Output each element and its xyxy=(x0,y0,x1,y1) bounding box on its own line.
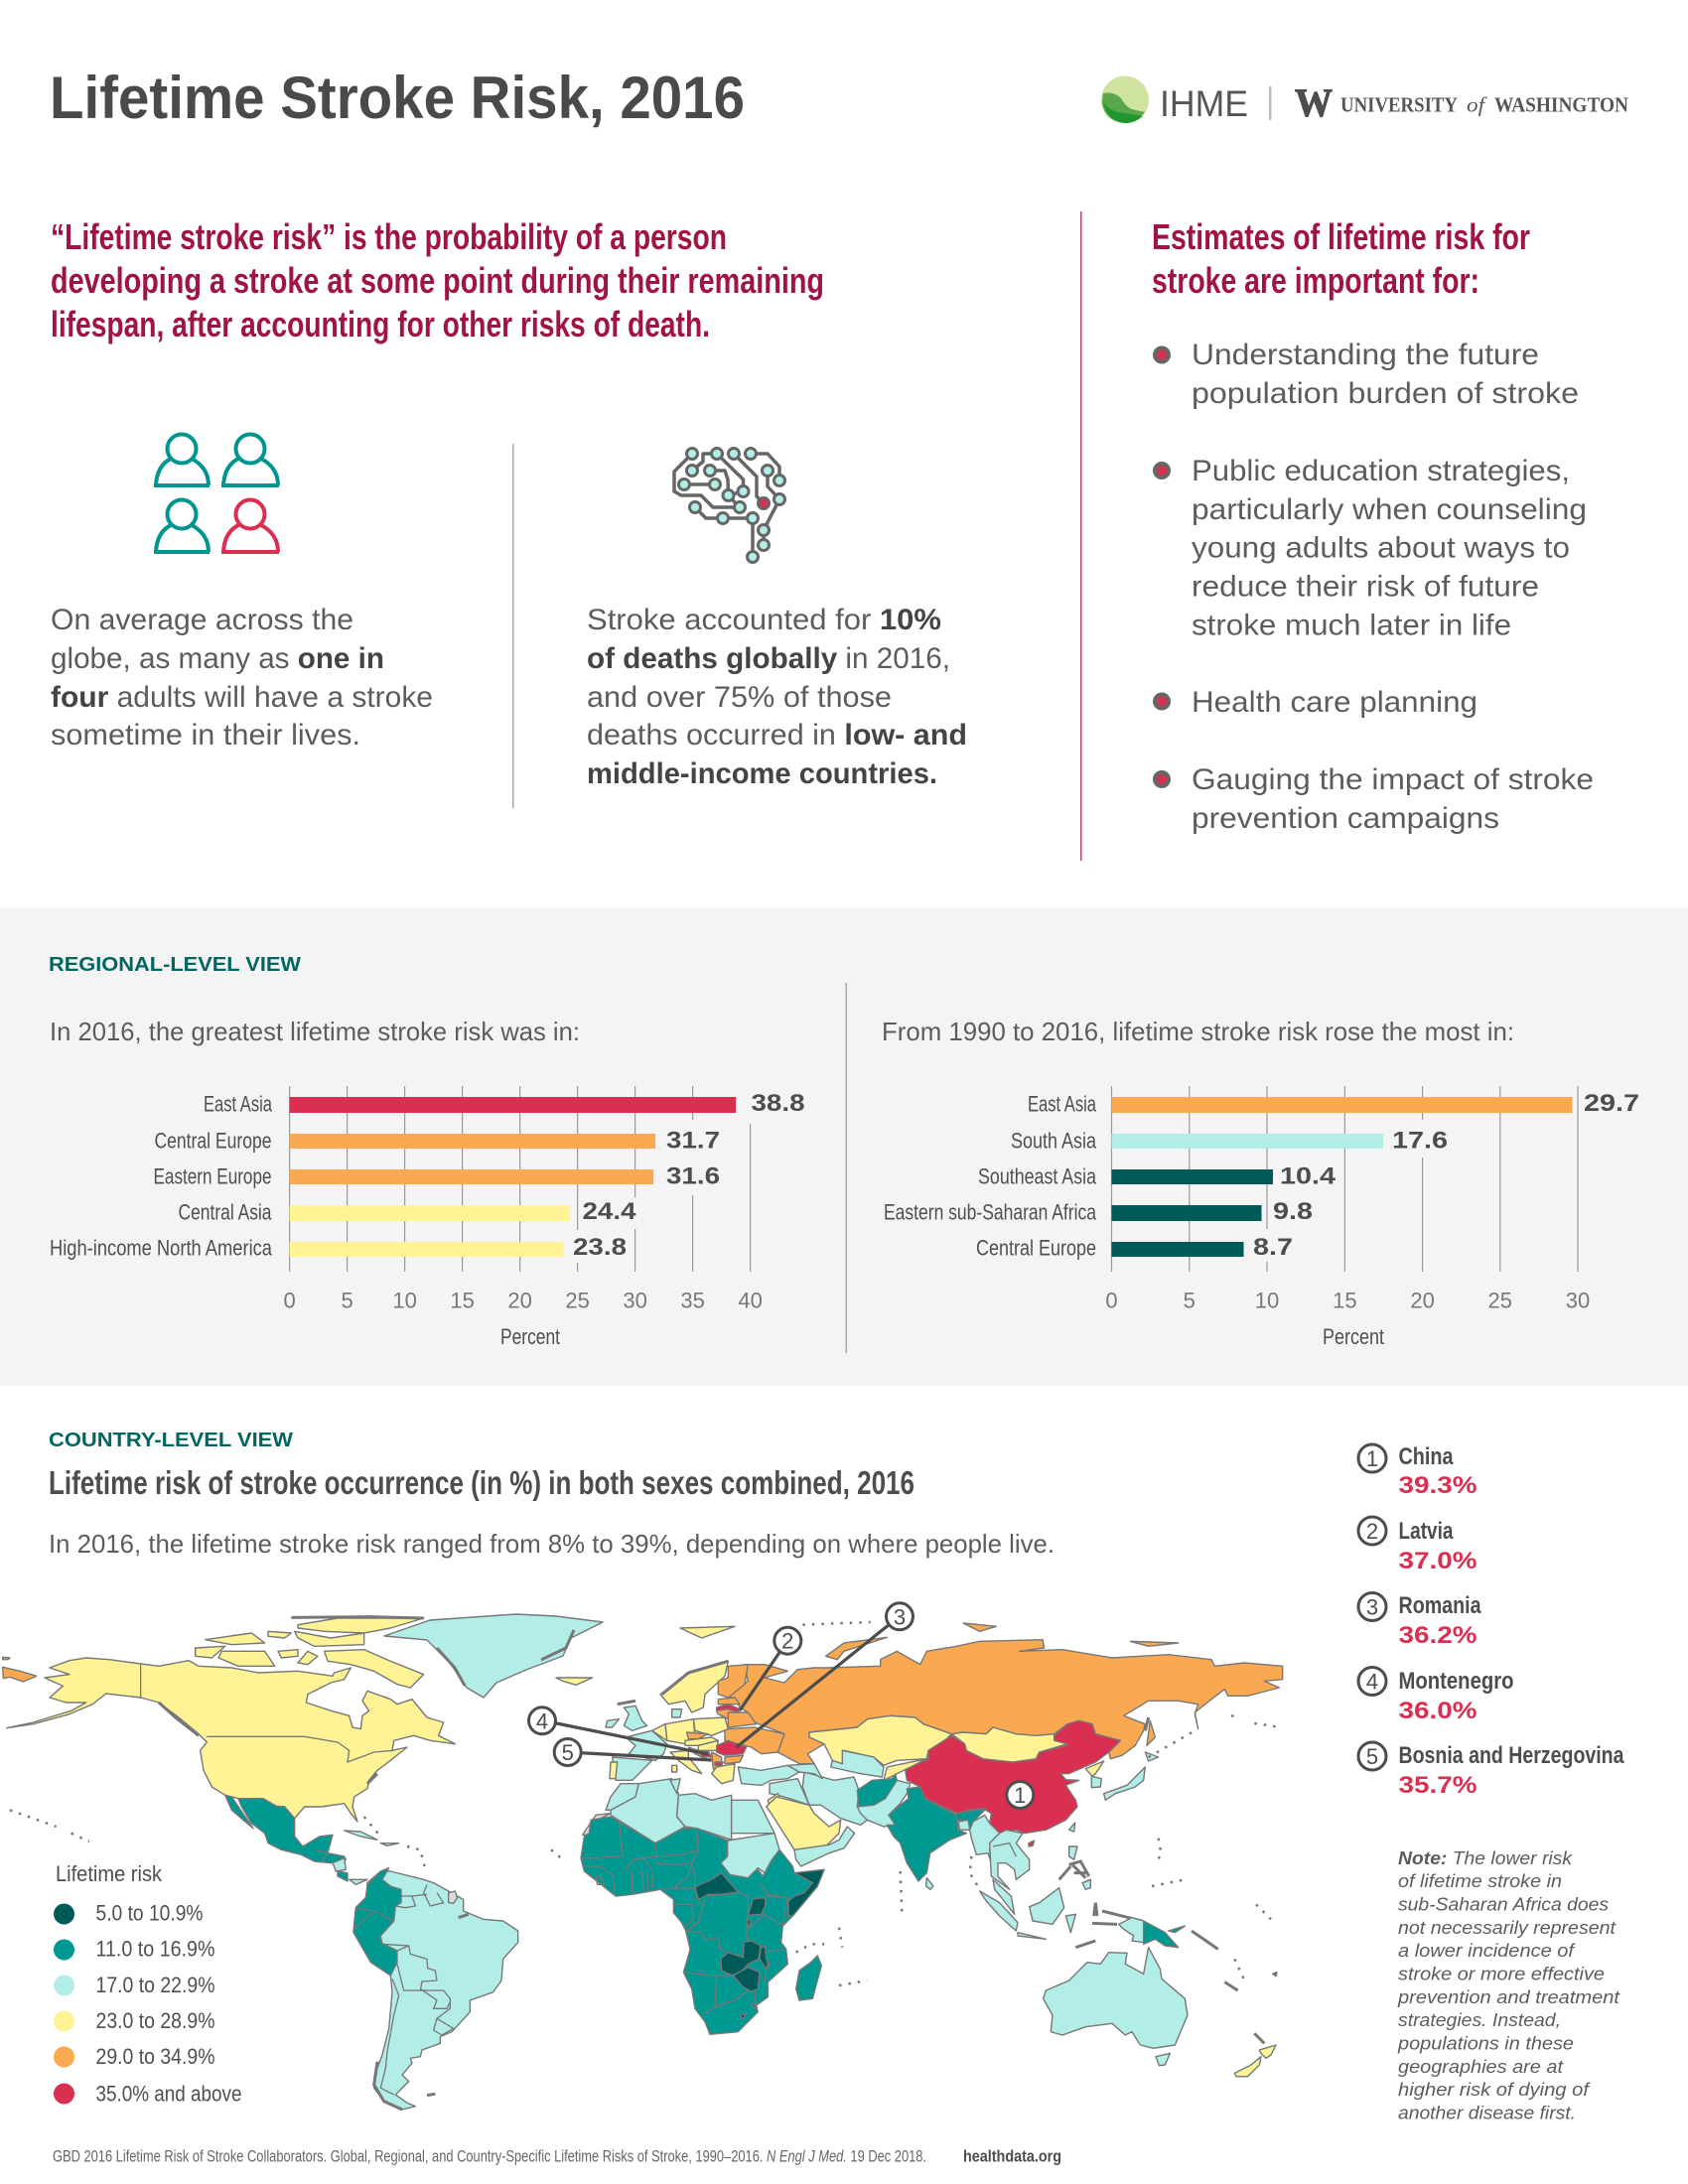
icon: IHME globe xyxy=(1101,75,1149,123)
rank 3: Romania: Romania xyxy=(1398,1592,1481,1619)
note: prevention and treatment xyxy=(1397,1987,1620,2007)
bar chart: greatest risk 2016 xyxy=(50,1017,808,1349)
bar chart: greatest risk 2016: High-income North America xyxy=(50,1235,273,1261)
map: South America xyxy=(353,1868,518,2110)
text: ten percent of deaths: of deaths globally in 2016, xyxy=(587,642,950,675)
University of Washington wordmark: UNIVERSITY xyxy=(1340,93,1458,117)
text: one in four xyxy=(51,604,433,751)
note: strategies. Instead, xyxy=(1398,2010,1561,2030)
world map xyxy=(3,1614,1283,2110)
importance heading xyxy=(1152,216,1530,301)
text: ten percent of deaths: Stroke accounted for 10% xyxy=(587,604,941,636)
importance heading: stroke are important for: xyxy=(1152,260,1479,301)
axis labels: 35 xyxy=(680,1289,705,1312)
map legend: Lifetime risk xyxy=(56,1861,163,1886)
rank 3: Romania: 3 xyxy=(1366,1594,1378,1620)
axis labels: 15 xyxy=(450,1289,475,1312)
rank 4: Montenegro: 4 xyxy=(1366,1670,1378,1694)
rank 2: Latvia: Latvia xyxy=(1398,1518,1454,1545)
bullet list: population burden of stroke xyxy=(1192,377,1579,410)
rank 2: Latvia xyxy=(1358,1517,1477,1574)
bullet list xyxy=(1155,339,1594,835)
chart subtitle: In 2016, the greatest lifetime stroke risk was in: xyxy=(50,1017,580,1046)
bullet list: Gauging the impact of stroke xyxy=(1192,763,1594,796)
bar chart: largest rise 1990 to 2016: 8.7 xyxy=(1253,1234,1293,1261)
axis labels: 0 xyxy=(283,1289,296,1312)
map legend: 11.0 to 16.9% xyxy=(95,1936,214,1962)
bar chart: largest rise 1990 to 2016: Central Europe xyxy=(976,1235,1096,1261)
axis labels: 25 xyxy=(565,1289,590,1312)
axis labels: 30 xyxy=(1566,1289,1590,1312)
note xyxy=(1397,1848,1620,2122)
note: Note: The lower risk xyxy=(1398,1848,1573,1868)
map: Asia xyxy=(728,1623,1283,1921)
definition heading: developing a stroke at some point during their remaining xyxy=(51,260,824,301)
bar chart: largest rise 1990 to 2016: 10.4 xyxy=(1280,1163,1336,1189)
text: ten percent of deaths xyxy=(587,604,967,790)
panel: regional-level view xyxy=(0,907,1688,1386)
note: geographies are at xyxy=(1398,2057,1564,2077)
bar chart: largest rise 1990 to 2016: Eastern sub-Saharan Africa xyxy=(884,1199,1097,1225)
map legend xyxy=(54,1861,242,2107)
callouts: leader lines and numbered markers: 4 xyxy=(536,1708,548,1733)
University of Washington wordmark: WASHINGTON xyxy=(1494,93,1628,117)
axis labels: 5 xyxy=(341,1289,353,1312)
rank 5: Bosnia and Herzegovina: 5 xyxy=(1366,1744,1378,1769)
University of Washington wordmark: of xyxy=(1467,93,1487,117)
bullet list: Understanding the future xyxy=(1192,339,1539,371)
bar chart: greatest risk 2016: 31.6 xyxy=(666,1163,720,1189)
axis labels xyxy=(1105,1289,1590,1349)
bullet list: reduce their risk of future xyxy=(1192,570,1539,604)
bullet list: prevention campaigns xyxy=(1192,802,1499,835)
note: higher risk of dying of xyxy=(1398,2080,1591,2100)
map legend: 35.0% and above xyxy=(95,2081,242,2107)
footer citation: GBD 2016 Lifetime Risk of Stroke Collaborators. Global, Regional, and Country-Specific Lifetime Risks of Stroke, 1990–2016. N Engl J Med. 19 Dec 2018. xyxy=(53,2146,926,2166)
bar chart: greatest risk 2016: 23.8 xyxy=(573,1234,627,1261)
University of Washington wordmark: W xyxy=(1295,80,1333,125)
bar chart: largest rise 1990 to 2016: South Asia xyxy=(1011,1128,1097,1154)
text: one in four: sometime in their lives. xyxy=(51,719,360,751)
bar chart: greatest risk 2016: 24.4 xyxy=(582,1198,636,1225)
callouts: leader lines and numbered markers: 2 xyxy=(781,1629,793,1654)
callouts: leader lines and numbered markers: 1 xyxy=(1014,1783,1026,1808)
axis labels: 25 xyxy=(1488,1289,1512,1312)
importance heading: Estimates of lifetime risk for xyxy=(1152,216,1530,257)
rank 5: Bosnia and Herzegovina: 35.7% xyxy=(1398,1772,1477,1799)
rank 5: Bosnia and Herzegovina: Bosnia and Herzegovina xyxy=(1398,1742,1624,1769)
map subtitle: In 2016, the lifetime stroke risk ranged from 8% to 39%, depending on where people live. xyxy=(49,1529,1055,1559)
rank 4: Montenegro xyxy=(1358,1668,1513,1724)
axis labels: Percent xyxy=(500,1324,560,1349)
bar chart: greatest risk 2016: Central Europe xyxy=(155,1128,272,1154)
note: a lower incidence of xyxy=(1398,1941,1576,1961)
bar chart: greatest risk 2016: Central Asia xyxy=(179,1199,272,1225)
axis labels: 15 xyxy=(1333,1289,1357,1312)
rank 2: Latvia: 37.0% xyxy=(1398,1548,1477,1574)
icon: brain circuit xyxy=(674,449,784,562)
IHME wordmark: IHME xyxy=(1160,83,1248,124)
bar chart: greatest risk 2016: 31.7 xyxy=(666,1128,720,1154)
note: another disease first. xyxy=(1398,2103,1576,2122)
axis labels: 10 xyxy=(1255,1289,1279,1312)
axis labels: 30 xyxy=(623,1289,647,1312)
rank 3: Romania xyxy=(1358,1592,1481,1649)
bullet list: Public education strategies, xyxy=(1192,455,1570,487)
rank 4: Montenegro: 36.0% xyxy=(1398,1698,1477,1724)
University of Washington wordmark xyxy=(1295,80,1628,125)
bar chart: largest rise 1990 to 2016 xyxy=(882,1017,1639,1349)
rank 1: China: 39.3% xyxy=(1398,1472,1477,1499)
text: one in four: globe, as many as one in xyxy=(51,642,384,675)
text: one in four: four adults will have a stroke xyxy=(51,681,433,714)
bullet list: Health care planning xyxy=(1192,686,1477,719)
callouts: leader lines and numbered markers: 3 xyxy=(894,1604,906,1629)
section heading: regional: REGIONAL-LEVEL VIEW xyxy=(49,954,301,976)
rank 3: Romania: 36.2% xyxy=(1398,1622,1477,1649)
rank 1: China: 1 xyxy=(1366,1446,1378,1471)
axis labels: 20 xyxy=(507,1289,532,1312)
map legend: 29.0 to 34.9% xyxy=(95,2044,214,2069)
text: ten percent of deaths: deaths occurred in low- and xyxy=(587,719,967,751)
text: ten percent of deaths: middle-income countries. xyxy=(587,757,937,790)
map: Greenland xyxy=(384,1614,603,1698)
bar chart: largest rise 1990 to 2016: 29.7 xyxy=(1584,1090,1639,1117)
bar chart: largest rise 1990 to 2016: 9.8 xyxy=(1273,1198,1313,1225)
rank 4: Montenegro: Montenegro xyxy=(1398,1668,1513,1695)
map legend: 17.0 to 22.9% xyxy=(95,1973,214,1997)
bar chart: largest rise 1990 to 2016: Southeast Asia xyxy=(978,1163,1097,1189)
note: of lifetime stroke in xyxy=(1398,1871,1562,1891)
logos: IHME and University of Washington xyxy=(1101,75,1628,125)
map title: Lifetime risk of stroke occurrence (in %) in both sexes combined, 2016 xyxy=(49,1464,914,1501)
axis labels: 0 xyxy=(1105,1289,1118,1312)
footer website: healthdata.org xyxy=(963,2146,1061,2166)
callouts: leader lines and numbered markers: 5 xyxy=(562,1740,574,1765)
definition heading: “Lifetime stroke risk” is the probability of a person xyxy=(51,216,727,257)
bullet list: particularly when counseling xyxy=(1192,493,1587,526)
bar chart: greatest risk 2016: Eastern Europe xyxy=(153,1163,272,1189)
callouts: leader lines and numbered markers xyxy=(528,1603,1034,1809)
bar chart: greatest risk 2016: 38.8 xyxy=(751,1090,804,1117)
rank 2: Latvia: 2 xyxy=(1366,1519,1378,1544)
note: populations in these xyxy=(1397,2033,1574,2053)
map legend: 23.0 to 28.9% xyxy=(95,2008,214,2033)
bullet list: stroke much later in life xyxy=(1192,610,1511,641)
axis labels xyxy=(283,1289,763,1349)
icon: four people, one in red xyxy=(154,435,279,552)
map: Europe, Middle East and North Africa xyxy=(556,1622,871,1853)
map: Sub-Saharan Africa xyxy=(551,1817,867,2034)
axis labels: 40 xyxy=(738,1289,763,1312)
map legend: 5.0 to 10.9% xyxy=(95,1900,203,1926)
chart subtitle: From 1990 to 2016, lifetime stroke risk rose the most in: xyxy=(882,1017,1514,1046)
bar chart: greatest risk 2016: East Asia xyxy=(204,1092,273,1116)
axis labels: 5 xyxy=(1184,1289,1196,1312)
bar chart: largest rise 1990 to 2016: 17.6 xyxy=(1392,1128,1448,1154)
axis labels: 20 xyxy=(1410,1289,1435,1312)
title: Lifetime Stroke Risk, 2016 xyxy=(50,65,745,131)
rank 1: China xyxy=(1358,1443,1477,1499)
definition heading: lifespan, after accounting for other risks of death. xyxy=(51,304,710,344)
section heading: country: COUNTRY-LEVEL VIEW xyxy=(49,1430,293,1451)
axis labels: Percent xyxy=(1323,1324,1384,1349)
rank 1: China: China xyxy=(1398,1443,1454,1470)
map: North and Central America xyxy=(3,1617,455,1884)
text: one in four: On average across the xyxy=(51,604,353,636)
map: Southeast Asia and Oceania xyxy=(980,1846,1277,2077)
axis labels: 10 xyxy=(392,1289,417,1312)
rank 5: Bosnia and Herzegovina xyxy=(1358,1742,1624,1799)
definition heading xyxy=(51,216,824,344)
note: stroke or more effective xyxy=(1398,1964,1605,1983)
ranked country list xyxy=(1358,1443,1624,1799)
note: not necessarily represent xyxy=(1398,1918,1617,1938)
bullet list: young adults about ways to xyxy=(1192,532,1570,564)
note: sub-Saharan Africa does xyxy=(1398,1894,1609,1914)
bar chart: largest rise 1990 to 2016: East Asia xyxy=(1028,1092,1097,1116)
text: ten percent of deaths: and over 75% of those xyxy=(587,681,892,714)
